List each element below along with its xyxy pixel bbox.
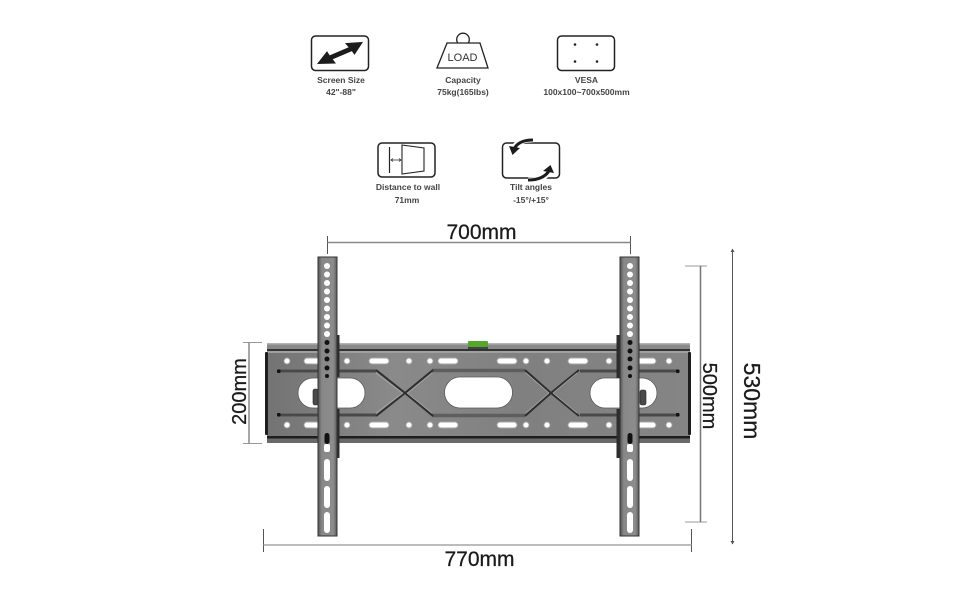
icon: VESA holes xyxy=(558,36,614,70)
horizontal mounting plate xyxy=(265,343,691,443)
icon: screen size arrow xyxy=(312,36,368,70)
wall mount bracket xyxy=(265,257,691,536)
icon: wall distance xyxy=(378,143,435,177)
dimension: 500mm height xyxy=(685,266,720,522)
plate holes xyxy=(284,358,672,428)
icon: tilt arrows xyxy=(502,139,560,181)
icon: load weight: LOAD xyxy=(448,52,478,64)
icon block: VESA xyxy=(543,36,630,97)
icon block: capacity: 75kg(165lbs) xyxy=(437,87,489,97)
caption: VESA: VESA xyxy=(575,75,598,85)
bubble level xyxy=(468,341,488,349)
left vertical arm xyxy=(313,257,340,536)
dimension: 500mm height: 500mm xyxy=(698,363,720,429)
icon block: VESA: 100x100~700x500mm xyxy=(543,87,630,97)
icon block: capacity xyxy=(437,33,489,97)
plate ridge lines xyxy=(278,370,678,416)
dimension: 770mm width: 770mm xyxy=(444,548,515,571)
caption: screen size: Screen Size xyxy=(317,75,365,85)
caption: distance to wall: Distance to wall xyxy=(376,182,440,192)
large oval openings xyxy=(298,377,657,408)
dimension: 700mm width: 700mm xyxy=(446,221,517,244)
icon block: distance to wall: 71mm xyxy=(395,195,420,205)
right vertical arm xyxy=(616,257,646,536)
dimension: 700mm width xyxy=(328,221,630,254)
dimension: 530mm height xyxy=(730,248,765,544)
icon block: screen size xyxy=(312,36,368,97)
icon block: tilt angles: -15°/+15° xyxy=(513,195,550,205)
caption: tilt angles: Tilt angles xyxy=(510,182,552,192)
dimension: 530mm height: 530mm xyxy=(739,363,765,439)
dimension: 770mm width xyxy=(264,529,692,571)
dimension: 200mm height: 200mm xyxy=(229,358,251,425)
icon block: tilt angles xyxy=(502,139,560,205)
caption: capacity: Capacity xyxy=(445,75,481,85)
icon block: distance to wall xyxy=(376,143,440,205)
dimension: 200mm height xyxy=(229,342,262,444)
icon block: screen size: 42"-88" xyxy=(326,87,356,97)
